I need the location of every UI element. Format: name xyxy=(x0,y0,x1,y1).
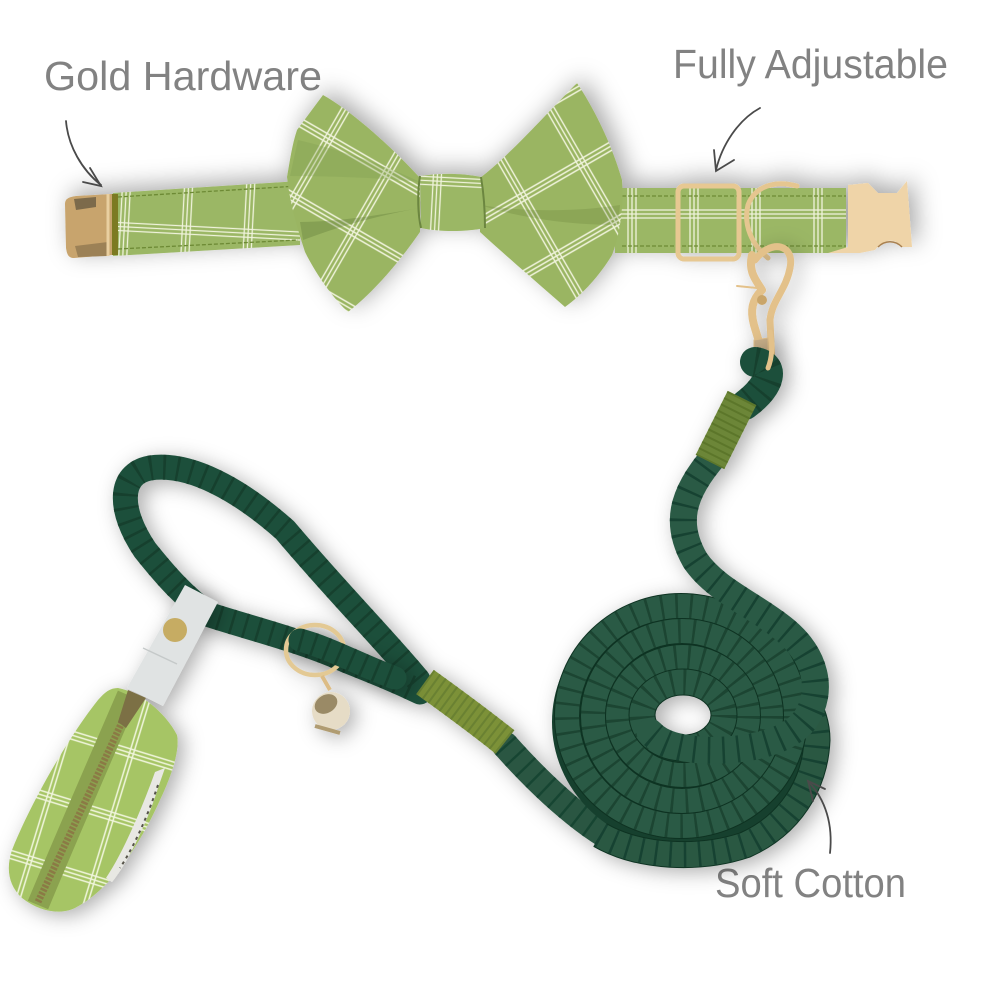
zipper tape xyxy=(38,695,128,905)
charm xyxy=(311,676,350,733)
rope through ring xyxy=(300,640,395,678)
arrow: to rope coil xyxy=(808,781,831,853)
rope: upper section crossing over coil xyxy=(650,455,815,750)
rope: top loop at clasp xyxy=(745,362,768,405)
rope: straight section to coil xyxy=(505,745,625,845)
poop bag holder xyxy=(9,585,218,912)
zipper pull xyxy=(118,690,146,728)
gold ring and charm xyxy=(286,625,395,733)
gold buckle: left xyxy=(65,194,112,258)
bag body xyxy=(9,688,178,912)
bow: right wing xyxy=(480,83,623,307)
rope: handle loop xyxy=(125,467,420,692)
collar band: right segment xyxy=(615,188,846,253)
leash rope and coil xyxy=(125,332,817,855)
collar band: left segment xyxy=(111,181,300,256)
gold clasp tip over rope xyxy=(768,332,772,368)
olive wrap: top xyxy=(710,398,742,462)
olive wrap: bottom xyxy=(425,682,505,742)
label: Gold Hardware: Gold Hardware xyxy=(44,53,322,99)
label: Soft Cotton: Soft Cotton xyxy=(715,860,906,906)
rope coil rings xyxy=(567,606,817,855)
arrow: to slider xyxy=(714,108,760,171)
collar with bow tie xyxy=(65,83,912,312)
slider buckle xyxy=(678,186,739,259)
bag label xyxy=(106,768,165,882)
label: Fully Adjustable: Fully Adjustable xyxy=(673,41,948,87)
bow: left wing xyxy=(287,95,420,312)
coil underlay xyxy=(597,642,767,802)
bow: centre knot xyxy=(418,174,485,231)
ring xyxy=(286,625,344,675)
white strap xyxy=(127,585,218,706)
arrow: to gold buckle xyxy=(66,121,101,186)
zipper teeth xyxy=(38,722,122,902)
gold buckle: right xyxy=(828,181,912,253)
D-ring xyxy=(747,184,797,258)
swivel clasp xyxy=(737,247,791,365)
